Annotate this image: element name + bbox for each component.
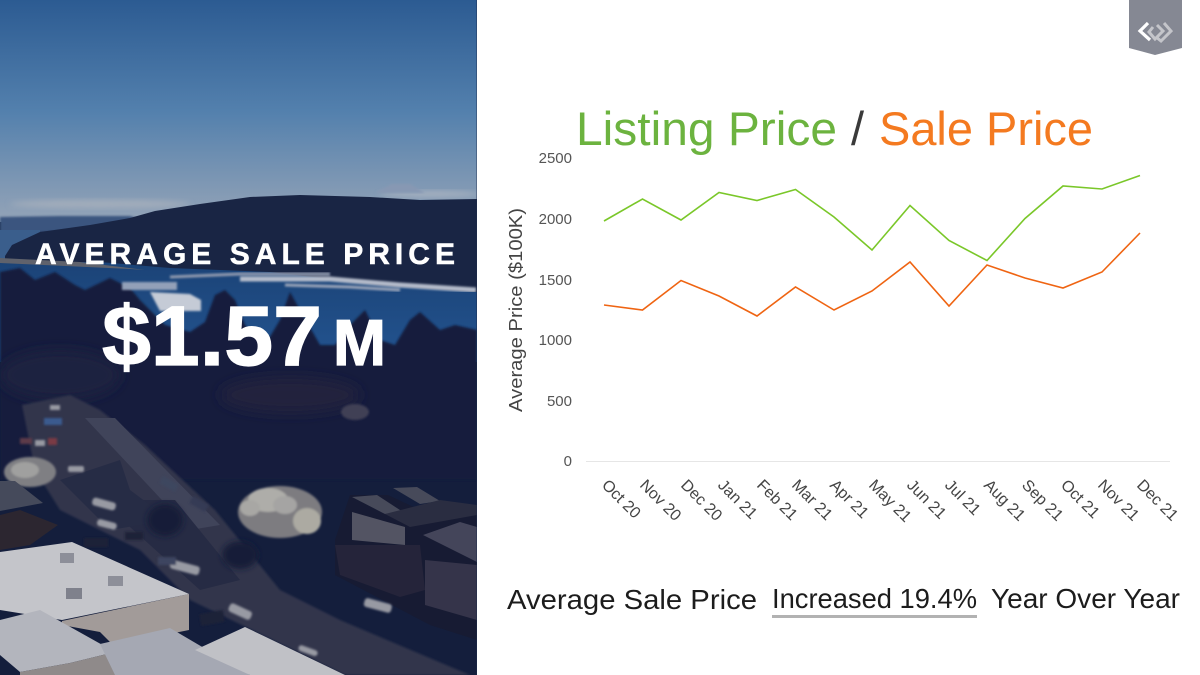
- x axis labels: Aug 21: [980, 477, 1028, 525]
- key figure: $1.57M: M: [333, 306, 386, 379]
- chart title: /: [851, 102, 865, 155]
- y axis labels: 500: [547, 393, 572, 410]
- heading: Average Sale Price: AVERAGE SALE PRICE: [35, 238, 455, 271]
- y axis labels: [539, 150, 572, 470]
- icon: brand shield logo: [1129, 0, 1182, 55]
- x axis labels: Dec 20: [677, 477, 725, 525]
- x axis labels: Nov 20: [636, 477, 684, 525]
- key figure: $1.57M: $1.57: [102, 289, 322, 383]
- x axis labels: Mar 21: [788, 477, 835, 524]
- marina: [170, 274, 476, 290]
- navy vertical edge: [476, 0, 477, 675]
- x axis labels: Oct 21: [1057, 477, 1103, 522]
- series: sale price: [604, 233, 1140, 316]
- x axis labels: May 21: [865, 477, 914, 526]
- blossom trees: [4, 404, 369, 538]
- summary sentence: Increased 19.4%: [772, 583, 977, 614]
- panel: aerial photo with navy overlay: [0, 0, 480, 675]
- x axis labels: Nov 21: [1094, 477, 1142, 525]
- summary sentence: Average Sale Price: [507, 584, 757, 615]
- foreground trees: [0, 267, 477, 362]
- y axis labels: 1000: [539, 332, 572, 349]
- dark foliage on town: [147, 504, 258, 569]
- chart title: [576, 102, 1093, 155]
- white roofs and walls: [0, 542, 345, 675]
- x axis labels: Feb 21: [753, 477, 800, 524]
- x axis labels: Jan 21: [714, 477, 760, 523]
- y axis title: Average Price ($100K): [506, 208, 526, 412]
- summary sentence: Year Over Year: [991, 583, 1180, 614]
- y axis labels: 2500: [539, 150, 572, 167]
- line chart: listing vs sale price: [506, 150, 1181, 526]
- x axis labels: [598, 477, 1181, 526]
- summary sentence: [507, 583, 1180, 618]
- series: listing price: [604, 176, 1140, 260]
- chart title: Listing Price: [576, 102, 837, 155]
- y axis labels: 0: [564, 453, 572, 470]
- x axis labels: Sep 21: [1018, 477, 1066, 525]
- right buildings: [335, 487, 477, 640]
- y axis labels: 1500: [539, 272, 572, 289]
- x axis labels: Jun 21: [903, 477, 949, 523]
- x axis labels: Dec 21: [1133, 477, 1181, 525]
- x axis labels: Apr 21: [826, 477, 872, 522]
- ferry: [122, 282, 201, 311]
- chart title: Sale Price: [879, 102, 1093, 155]
- x axis labels: Oct 20: [598, 477, 644, 522]
- cars: [20, 405, 393, 657]
- y axis labels: 2000: [539, 211, 572, 228]
- left dark roofs: [0, 481, 43, 511]
- town ground: [22, 379, 468, 675]
- x axis labels: Jul 21: [941, 477, 983, 519]
